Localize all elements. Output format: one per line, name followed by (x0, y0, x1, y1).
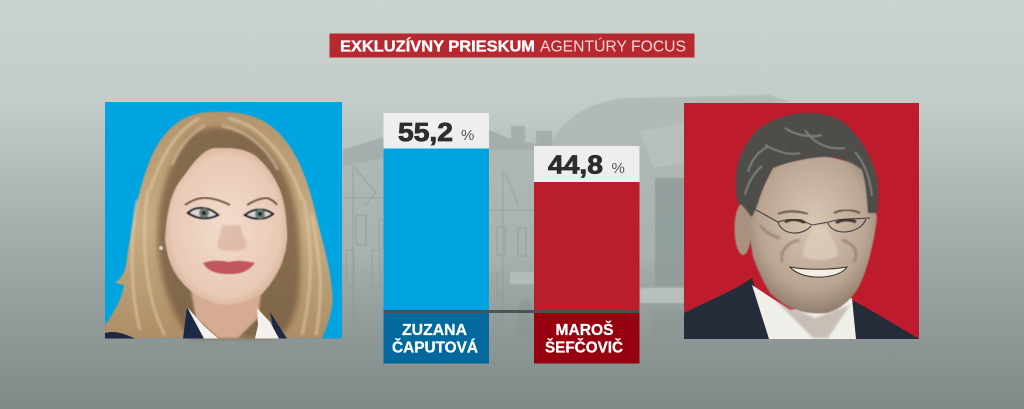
blouse (187, 307, 279, 338)
eyebrows (185, 198, 277, 205)
face (165, 148, 287, 305)
baseline (384, 310, 640, 313)
name box (384, 313, 489, 364)
value: 44,8 (548, 150, 603, 180)
nose (217, 225, 246, 251)
hair highlights (745, 128, 872, 196)
portrait panel: Maroš Šefčovič (684, 103, 919, 339)
banner bold text: EXKLUZÍVNY PRIESKUM (340, 38, 535, 56)
portrait panel: Zuzana Čaputová (105, 102, 342, 338)
face (750, 155, 877, 313)
hair strands (132, 118, 320, 335)
shirt (752, 285, 856, 339)
name first line: ZUZANA (402, 322, 467, 339)
ear (734, 203, 752, 255)
eyes (785, 219, 856, 223)
name second line: ČAPUTOVÁ (392, 338, 478, 356)
hair (736, 113, 878, 217)
jacket (105, 307, 287, 338)
name box (534, 313, 640, 364)
glasses (747, 205, 870, 233)
earrings (159, 246, 163, 250)
value: 55,2 (398, 117, 453, 147)
hair (105, 112, 333, 338)
eyebrows (778, 210, 860, 214)
part line (212, 114, 214, 147)
lips (203, 261, 255, 274)
name first line: MAROŠ (556, 321, 614, 339)
smile (790, 267, 847, 277)
building silhouette (343, 95, 790, 340)
suit (684, 278, 918, 339)
hair shadow (157, 128, 300, 338)
nose (803, 226, 838, 260)
eyes (188, 208, 273, 219)
percent sign: % (461, 127, 474, 144)
banner regular text: AGENTÚRY FOCUS (540, 38, 686, 56)
percent sign: % (612, 160, 625, 177)
collar shadow (775, 300, 850, 338)
header banner (330, 34, 694, 58)
bar: Maroš Šefčovič (534, 146, 640, 364)
value box (534, 146, 640, 182)
cheek lines (760, 225, 856, 262)
name second line: ŠEFČOVIČ (545, 338, 623, 356)
neck (190, 285, 262, 338)
value box (384, 113, 489, 148)
bar: Zuzana Čaputová (384, 113, 489, 364)
